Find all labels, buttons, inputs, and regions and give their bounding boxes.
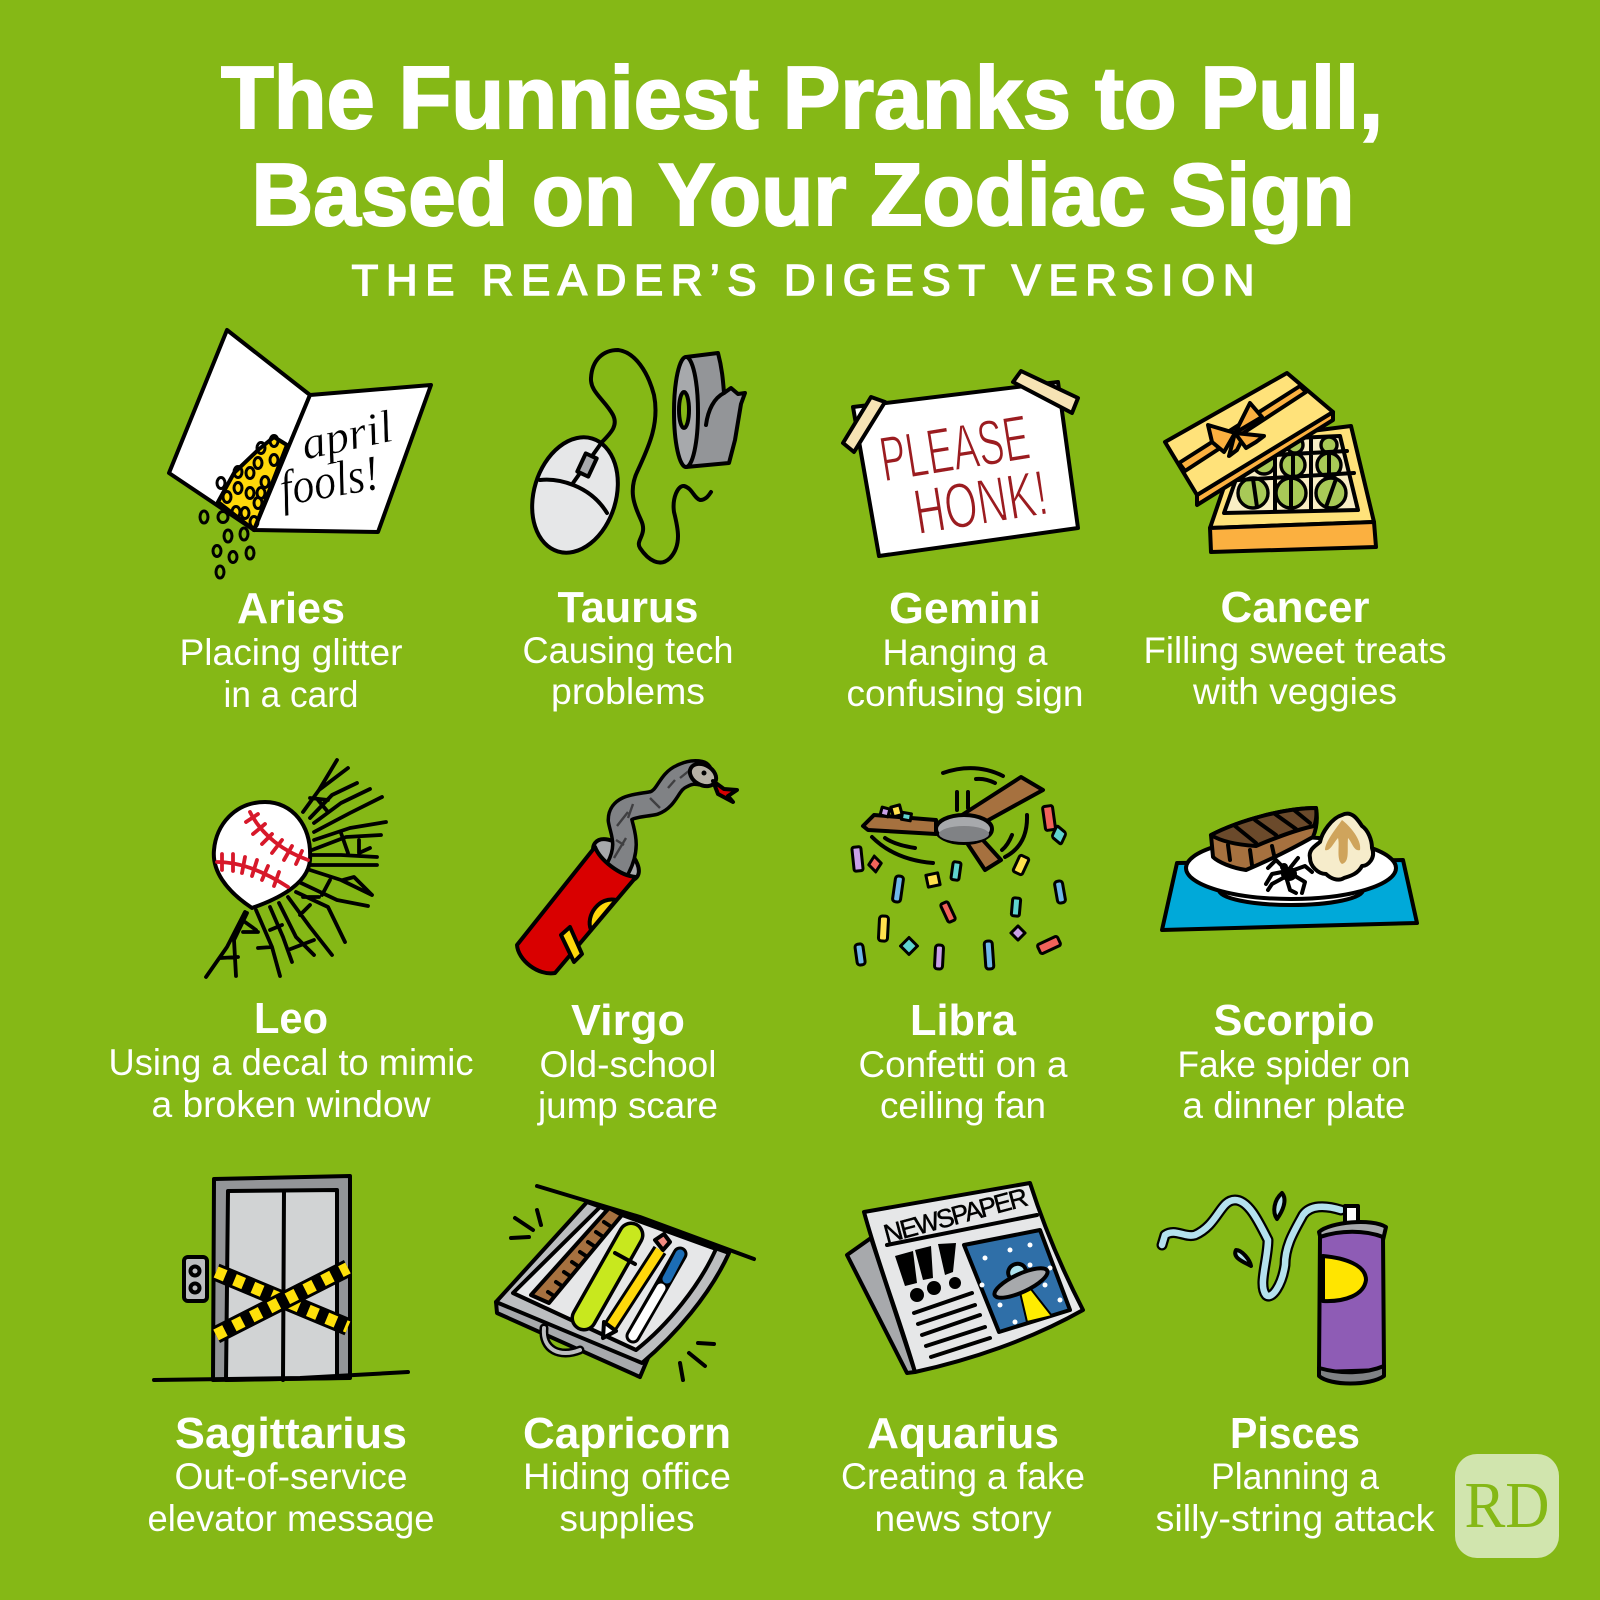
icon: please honk sign [843,371,1078,556]
panel: Taurus [519,350,745,712]
label: Capricorn: Capricorn [523,1409,731,1458]
label: Scorpio: a dinner plate [1182,1085,1406,1126]
label: Virgo [537,996,718,1126]
icon: fake newspaper: NEWSPAPER [880,1182,1031,1249]
label: Aquarius: news story [874,1498,1052,1539]
label: Sagittarius: Out-of-service [174,1456,408,1497]
label: Aries: Placing glitter [180,632,402,673]
panel: Aquarius [841,1182,1085,1539]
label: Aries: in a card [224,674,358,715]
title: Based on Your Zodiac Sign [252,145,1354,244]
icon: baseball and cracked window [206,760,386,977]
label: Libra: Libra [910,996,1017,1045]
label: Taurus: problems [551,671,705,712]
panel: Leo [108,760,474,1125]
label: Leo: Using a decal to mimic [108,1042,474,1083]
icon: ceiling fan and confetti [852,768,1066,969]
label: Taurus: Taurus [558,583,698,632]
title: The Funniest Pranks to Pull, [221,48,1383,147]
label: Pisces: Planning a [1211,1456,1379,1497]
label: Capricorn [523,1409,731,1539]
label: Taurus [522,583,734,712]
panel: Cancer [1144,373,1446,712]
label: Capricorn: supplies [560,1498,694,1539]
icon: glitter card: april [296,400,397,469]
icon: glitter card [169,330,431,578]
title [221,48,1383,244]
label: Aquarius: Creating a fake [841,1456,1085,1497]
label: Leo [108,994,474,1125]
panel: Scorpio [1162,808,1417,1126]
label: Aquarius: Aquarius [867,1409,1059,1458]
icon: silly string can [1162,1193,1386,1384]
icon: chocolate box with sprouts [1165,373,1376,552]
icon: please honk sign: PLEASE [875,401,1034,496]
icon: snake in a can [517,759,737,973]
panel: Capricorn [496,1186,754,1539]
label: Aries: Aries [237,584,345,633]
logo: RD badge: RD [1464,1469,1550,1542]
icon: fake newspaper [847,1182,1083,1373]
panel: Sagittarius [148,1176,434,1539]
label: Capricorn: Hiding office [523,1456,731,1497]
label: Aries [180,584,402,715]
label: Gemini: confusing sign [846,673,1084,714]
label: Cancer: Filling sweet treats [1144,630,1446,671]
panel: Gemini [843,371,1084,714]
panel: Virgo [517,759,737,1126]
label: Scorpio [1178,996,1410,1126]
label: Sagittarius: elevator message [148,1498,434,1539]
label: Leo: Leo [254,994,328,1043]
label: Virgo: jump scare [537,1085,718,1126]
label: Pisces: Pisces [1230,1409,1360,1458]
label: Libra: ceiling fan [880,1085,1046,1126]
label: Sagittarius: Sagittarius [175,1409,407,1458]
logo: RD badge [1455,1454,1559,1558]
icon: taped-off elevator [154,1176,408,1380]
label: Libra: Confetti on a [858,1044,1068,1085]
label: Gemini: Gemini [889,584,1041,633]
label: Cancer: Cancer [1220,583,1370,632]
label: Aquarius [841,1409,1085,1539]
label: Sagittarius [148,1409,434,1539]
label: Virgo: Old-school [540,1044,716,1085]
label: Taurus: Causing tech [522,630,734,671]
label: Scorpio: Scorpio [1214,996,1374,1045]
label: Gemini [846,584,1084,714]
panel: Pisces [1156,1193,1435,1539]
icon: glitter card: fools! [275,444,383,517]
label: Cancer: with veggies [1192,671,1397,712]
label: Pisces: silly-string attack [1156,1498,1435,1539]
icon: desk drawer of office supplies [496,1186,754,1380]
label: Pisces [1156,1409,1435,1539]
label: Libra [858,996,1068,1126]
label: Leo: a broken window [152,1084,431,1125]
icon: please honk sign: HONK! [909,456,1052,548]
label: Virgo: Virgo [571,996,685,1045]
label: Cancer [1144,583,1446,712]
icon: dinner plate with fake spider [1162,808,1417,930]
panel: Aries [169,330,431,715]
label: Gemini: Hanging a [882,632,1048,673]
panel: Libra [852,768,1068,1126]
label: Scorpio: Fake spider on [1178,1044,1410,1085]
subtitle: THE READER’S DIGEST VERSION [352,256,1254,305]
icon: mouse and tape [519,350,745,563]
